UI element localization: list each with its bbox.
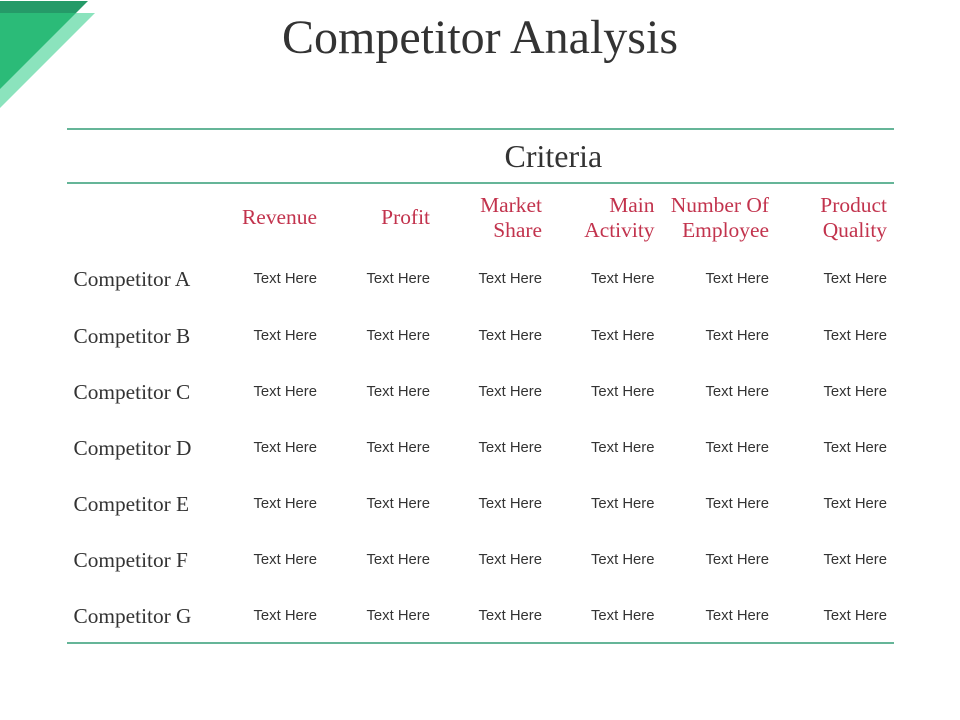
row: Competitor C: Text Here [823,384,887,400]
row: Competitor F [74,548,887,572]
column header: Number Of Employee [671,193,769,242]
row: Competitor C: Text Here [478,384,542,400]
column header: Main Activity [584,193,654,242]
row: Competitor G: Text Here [478,608,542,624]
row: Competitor G: Text Here [823,608,887,624]
column header: Product Quality: Product [820,193,887,217]
column header: Main Activity: Activity [584,218,654,242]
column header: Number Of Employee: Number Of [671,193,769,217]
row: Competitor C: Competitor C [74,380,190,404]
row: Competitor E: Text Here [823,496,887,512]
row: Competitor G: Text Here [253,608,317,624]
row: Competitor B: Text Here [253,328,317,344]
row: Competitor A [74,267,887,291]
row: Competitor B: Text Here [591,328,654,344]
row: Competitor D: Text Here [366,440,430,456]
row: Competitor D: Text Here [591,440,654,456]
row: Competitor F: Text Here [478,552,542,568]
row: Competitor E [74,492,887,516]
heading: Criteria: Criteria [504,138,602,174]
row: Competitor C: Text Here [705,384,769,400]
row: Competitor B: Text Here [478,328,542,344]
row: Competitor A: Text Here [823,271,887,287]
column header: Main Activity: Main [609,193,654,217]
column header: Profit: Profit [381,205,430,229]
row: Competitor F: Text Here [366,552,430,568]
row: Competitor A: Text Here [705,271,769,287]
row: Competitor F: Text Here [591,552,654,568]
column header: Product Quality [820,193,887,242]
row: Competitor G: Competitor G [74,604,191,628]
row: Competitor G: Text Here [591,608,654,624]
row: Competitor E: Text Here [478,496,542,512]
column header: Market Share: Market [480,193,542,217]
row: Competitor C: Text Here [366,384,430,400]
row: Competitor F: Text Here [823,552,887,568]
row: Competitor G: Text Here [366,608,430,624]
row: Competitor D: Text Here [705,440,769,456]
row: Competitor D [74,436,887,460]
row: Competitor E: Text Here [366,496,430,512]
row: Competitor E: Text Here [705,496,769,512]
row: Competitor A: Text Here [591,271,654,287]
row: Competitor A: Text Here [366,271,430,287]
row: Competitor A: Text Here [478,271,542,287]
row: Competitor C [74,380,887,404]
row: Competitor A: Competitor A [74,267,190,291]
row: Competitor B: Text Here [366,328,430,344]
row: Competitor B: Text Here [823,328,887,344]
row: Competitor F: Competitor F [74,548,188,572]
row: Competitor C: Text Here [253,384,317,400]
row: Competitor B: Competitor B [74,324,190,348]
row: Competitor D: Text Here [478,440,542,456]
row: Competitor D: Text Here [253,440,317,456]
row: Competitor E: Text Here [253,496,317,512]
icon: corner triangles [0,1,95,108]
row: Competitor E: Competitor E [74,492,189,516]
column headers [242,193,887,242]
column header: Market Share: Share [493,218,542,242]
column header: Product Quality: Quality [823,218,887,242]
column header: Market Share [480,193,542,242]
row: Competitor B [74,324,887,348]
column header: Revenue: Revenue [242,205,317,229]
row: Competitor C: Text Here [591,384,654,400]
row: Competitor D: Text Here [823,440,887,456]
row: Competitor G: Text Here [705,608,769,624]
row: Competitor F: Text Here [705,552,769,568]
row: Competitor E: Text Here [591,496,654,512]
column header: Number Of Employee: Employee [682,218,769,242]
row: Competitor A: Text Here [253,271,317,287]
row: Competitor D: Competitor D [74,436,191,460]
title: Competitor Analysis [282,11,678,64]
row: Competitor B: Text Here [705,328,769,344]
row: Competitor F: Text Here [253,552,317,568]
row: Competitor G [74,604,887,628]
